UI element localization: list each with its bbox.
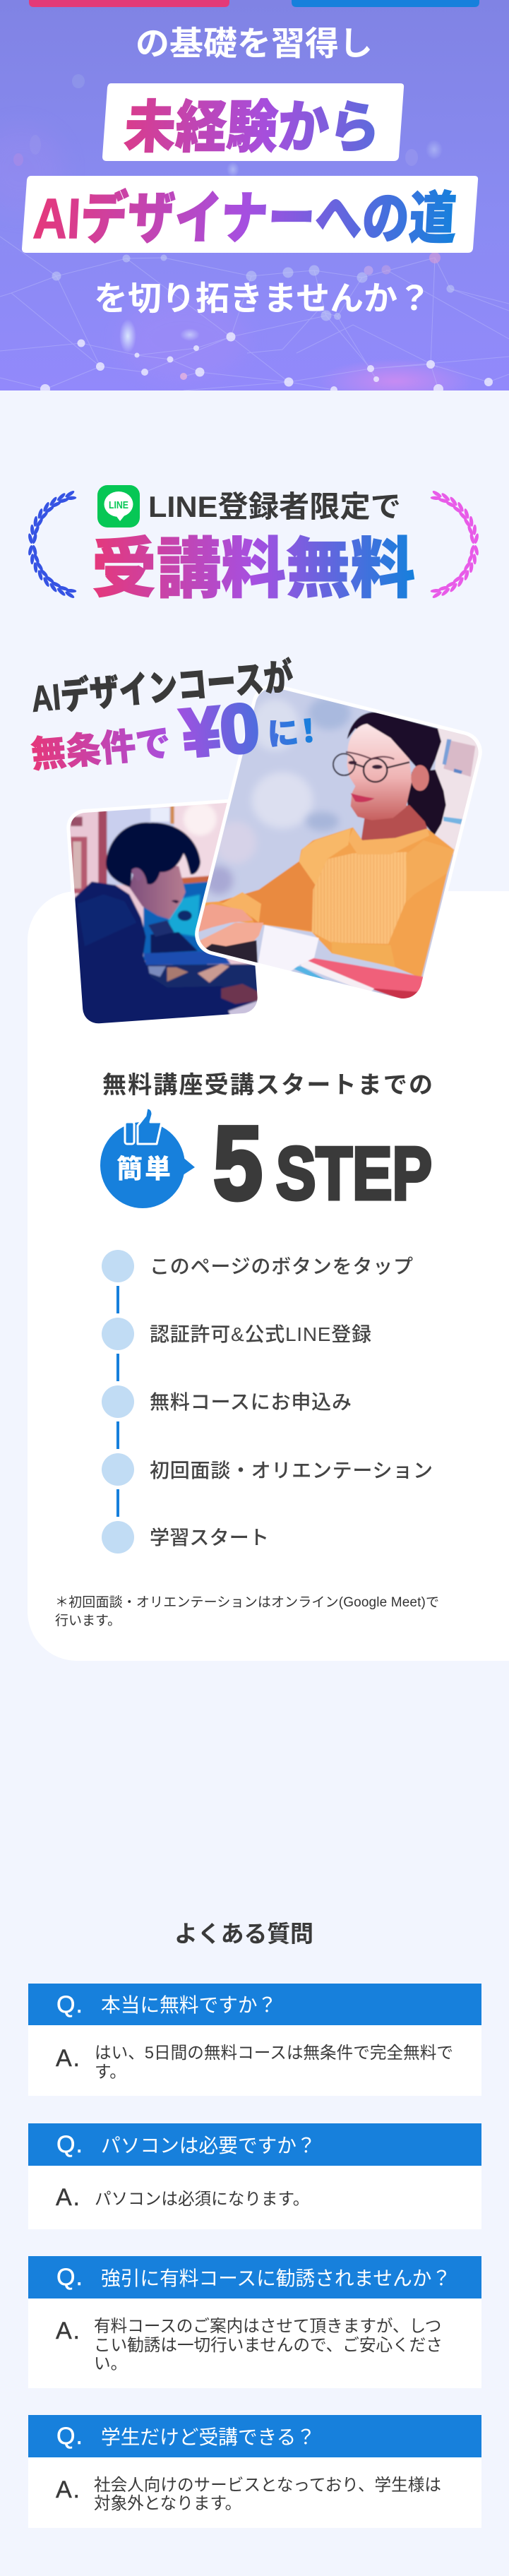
headline: 無条件で¥0に！: に <box>266 715 300 753</box>
FAQ item 2: パソコンは必須になります。 <box>95 2190 309 2209</box>
laurel wreath right <box>429 489 479 600</box>
sweater <box>184 828 454 978</box>
FAQ item 2 <box>28 2123 481 2229</box>
book <box>308 958 424 993</box>
5 STEP title: STEP <box>276 1132 432 1215</box>
hero line 1: の基礎を習得し <box>136 25 373 62</box>
neck <box>361 805 429 845</box>
icon: speech bubble with thumbs up: 簡単 <box>116 1155 171 1183</box>
FAQ item 4: A. <box>56 2476 80 2503</box>
FAQ item 2: A. <box>56 2184 80 2211</box>
headline: 無条件で¥0に！: ¥0 <box>179 688 263 772</box>
FAQ item 1: Q. <box>56 1991 83 2018</box>
icon: LINE: LINE <box>109 499 128 511</box>
photo: man at computer <box>66 799 258 1024</box>
headline: 無条件で¥0に！: ！ <box>292 713 325 751</box>
FAQ item 1 <box>28 1984 481 2096</box>
step 5 <box>102 1521 269 1554</box>
photo: woman at laptop <box>195 684 482 998</box>
laurel wreath left <box>28 489 78 600</box>
FAQ item 1: 本当に無料ですか？ <box>101 1994 277 2016</box>
5 STEP title: 5 <box>213 1105 263 1222</box>
laptop and pink case <box>184 932 198 960</box>
footnote: ＊初回面談・オリエンテーションはオンライン(Google Meet)で <box>55 1594 439 1610</box>
FAQ item 3: こい勧誘は一切行いませんので、ご安心くださ <box>94 2336 443 2355</box>
ponytail and hair <box>407 770 446 835</box>
footnote: 行います。 <box>55 1613 121 1628</box>
FAQ item 4: 学生だけど受講できる？ <box>101 2426 316 2448</box>
glasses <box>333 753 409 782</box>
FAQ item 3: 強引に有料コースに勧誘されませんか？ <box>101 2267 451 2289</box>
FAQ item 3: い。 <box>94 2355 127 2373</box>
headline: 無条件で¥0に！: 無条件で <box>30 723 172 776</box>
FAQ item 4: 社会人向けのサービスとなっており、学生様は <box>94 2476 441 2495</box>
steps heading: 無料講座受講スタートまでの <box>102 1072 433 1099</box>
hero line 2: を切り拓きませんか？ <box>94 280 431 317</box>
step 4 <box>102 1453 433 1486</box>
FAQ item 2: パソコンは必要ですか？ <box>101 2135 316 2157</box>
white foreground <box>256 966 412 1003</box>
step 5: 学習スタート <box>150 1527 269 1549</box>
step 3: 無料コースにお申込み <box>150 1391 352 1413</box>
network nodes <box>52 252 455 321</box>
step 1 <box>102 1250 413 1282</box>
step 2: 認証許可&公式LINE登録 <box>150 1323 371 1345</box>
FAQ item 1: す。 <box>95 2063 126 2082</box>
step 3 <box>102 1385 352 1418</box>
step 1: このページのボタンをタップ <box>150 1256 413 1277</box>
hands <box>199 903 253 932</box>
FAQ item 2: Q. <box>56 2131 83 2158</box>
FAQ item 3 <box>28 2256 481 2388</box>
face <box>347 724 412 821</box>
FAQ heading: よくある質問 <box>174 1921 313 1947</box>
5 STEP title <box>213 1105 432 1222</box>
icon: LINE <box>97 485 140 527</box>
headline: AIデザインコースが: AIデザインコースが <box>30 656 295 720</box>
LINE limited heading: LINE登録者限定で <box>148 490 401 523</box>
FAQ item 4: 対象外となります。 <box>94 2494 241 2513</box>
step 4: 初回面談・オリエンテーション <box>150 1460 433 1481</box>
mug <box>258 925 319 972</box>
hero panel <box>0 0 509 404</box>
steps timeline <box>102 1250 433 1554</box>
step 2 <box>102 1318 371 1350</box>
top buttons <box>29 0 479 7</box>
FAQ item 1: はい、5日間の無料コースは無条件で完全無料で <box>95 2044 453 2063</box>
footnote <box>55 1594 439 1628</box>
icon: speech bubble with thumbs up <box>100 1108 195 1208</box>
FAQ item 4: Q. <box>56 2423 83 2450</box>
highlighted label: 未経験から: 未経験から <box>123 96 382 159</box>
FAQ item 3: Q. <box>56 2264 83 2291</box>
free tuition heading: 受講料無料 <box>92 532 415 606</box>
FAQ item 1: A. <box>56 2045 80 2072</box>
network lines <box>0 237 509 390</box>
headline: 無条件で¥0に！ <box>27 683 326 785</box>
white steps panel <box>28 891 509 1661</box>
FAQ item 4 <box>28 2415 481 2528</box>
FAQ item 3: 有料コースのご案内はさせて頂きますが、しつ <box>94 2317 441 2336</box>
FAQ item 3: A. <box>56 2318 80 2344</box>
